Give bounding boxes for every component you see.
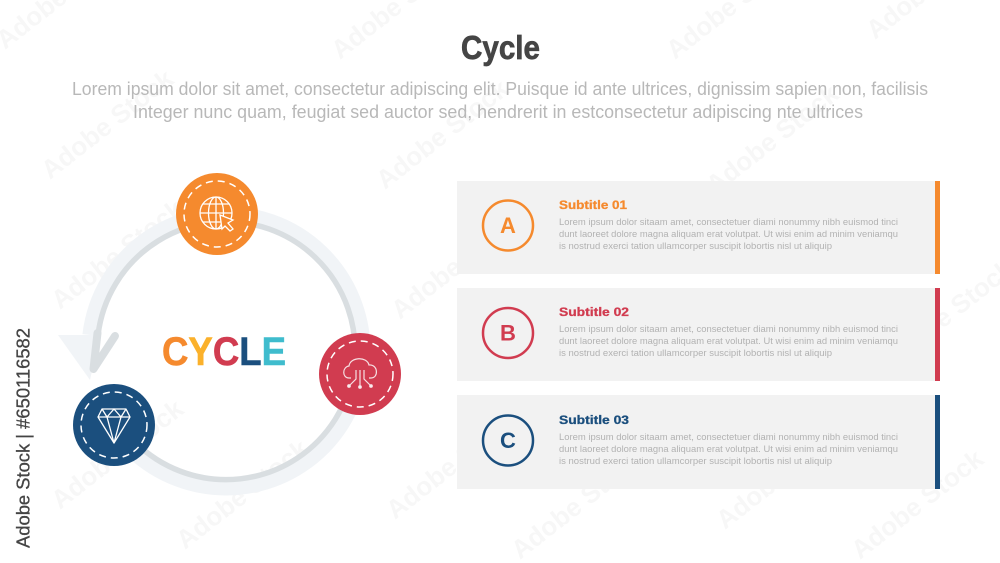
- body text A: is nostrud exerci tation ullamcorper suscipit lobortis nisl ut aliquip: [559, 241, 832, 252]
- cycle diagram: [58, 173, 401, 487]
- center word: CYCLE: [162, 330, 286, 374]
- subtitle 03: Subtitle 03: [559, 413, 629, 427]
- watermark pattern: Adobe Stock: [170, 433, 314, 555]
- panel: B: [457, 288, 940, 381]
- watermark pattern: Adobe Stock: [45, 393, 189, 515]
- watermark pattern: Adobe Stock: [505, 443, 649, 563]
- intro text: Lorem ipsum dolor sit amet, consectetur adipiscing elit. Puisque id ante ultrices, dignissim sapien non, facilisis: [72, 78, 928, 99]
- icon: globe with cursor: [200, 197, 233, 231]
- badge C: C: [500, 428, 516, 453]
- panel: C: [457, 395, 940, 489]
- watermark pattern: Adobe Stock: [35, 63, 179, 185]
- body text C: Lorem ipsum dolor sitaam amet, consectetuer diami nonummy nibh euismod tinci: [559, 432, 898, 443]
- body text A: [559, 217, 898, 252]
- panel: A: [457, 181, 940, 274]
- body text C: [559, 432, 898, 467]
- arrow ring: [58, 214, 362, 487]
- watermark pattern: Adobe Stock: [710, 413, 854, 535]
- watermark pattern: Adobe Stock: [385, 203, 529, 325]
- badge A: A: [500, 213, 516, 238]
- body text C: is nostrud exerci tation ullamcorper suscipit lobortis nisl ut aliquip: [559, 456, 832, 467]
- body text B: Lorem ipsum dolor sitaam amet, consectetuer diami nonummy nibh euismod tinci: [559, 324, 898, 335]
- body text A: Lorem ipsum dolor sitaam amet, consectetuer diami nonummy nibh euismod tinci: [559, 217, 898, 228]
- badge A: [483, 200, 533, 250]
- watermark pattern: Adobe Stock: [45, 193, 189, 315]
- node: diamond: [73, 384, 155, 466]
- badge B: B: [500, 320, 516, 346]
- icon: diamond: [98, 409, 130, 443]
- badge B: [483, 308, 533, 358]
- watermark pattern: Adobe Stock: [700, 78, 844, 200]
- icon: cloud network: [344, 359, 376, 388]
- node: cloud: [319, 333, 401, 415]
- watermark pattern: Adobe Stock: [370, 73, 514, 195]
- body text A: dunt laoreet dolore magna aliquam erat volutpat. Ut wisi enim ad minim veniamqu: [559, 229, 898, 240]
- title: Cycle: [461, 29, 540, 66]
- watermark pattern: Adobe Stock: [845, 443, 989, 563]
- body text B: dunt laoreet dolore magna aliquam erat volutpat. Ut wisi enim ad minim veniamqu: [559, 336, 898, 347]
- intro text: Integer nunc quam, feugiat sed auctor sed, hendrerit in estconsectetur adipiscing nte ultrices: [133, 101, 863, 122]
- subtitle 01: Subtitle 01: [559, 198, 627, 212]
- intro text: [72, 78, 928, 122]
- body text C: dunt laoreet dolore magna aliquam erat volutpat. Ut wisi enim ad minim veniamqu: [559, 444, 898, 455]
- body text B: [559, 324, 898, 359]
- badge C: [483, 416, 533, 466]
- subtitle 02: Subtitle 02: [559, 305, 629, 319]
- body text B: is nostrud exerci tation ullamcorper suscipit lobortis nisl ut aliquip: [559, 348, 832, 359]
- stock credit: Adobe Stock | #650116582: [14, 328, 34, 548]
- node: globe: [176, 173, 258, 255]
- watermark pattern: Adobe Stock: [380, 403, 524, 525]
